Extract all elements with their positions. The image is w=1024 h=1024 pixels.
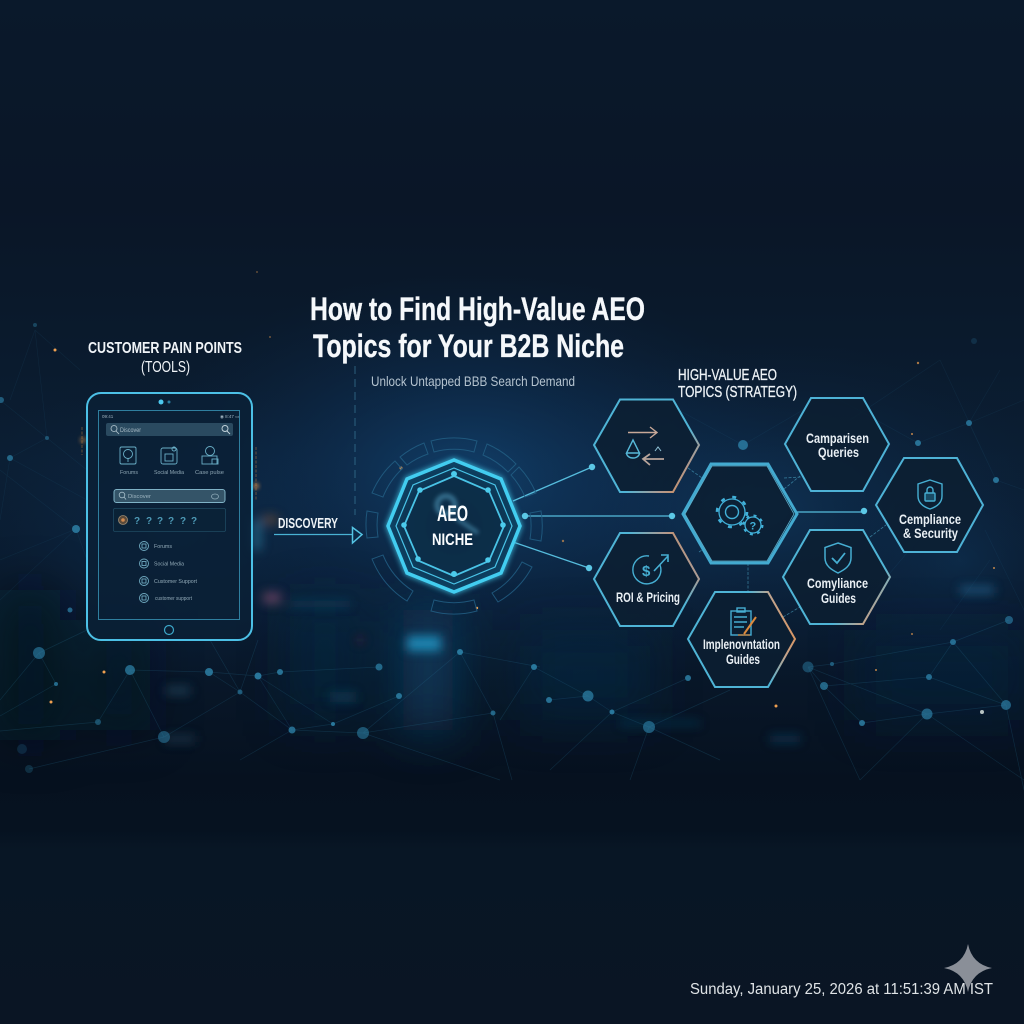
question row: ? <box>157 516 163 527</box>
heading: high-value AEO topics: HIGH-VALUE AEO <box>678 367 777 384</box>
icon: arrows and scale <box>626 427 664 465</box>
title <box>310 291 645 364</box>
icon: gears: ? <box>750 520 756 532</box>
list of sources: Social Media <box>154 562 185 568</box>
hexagon: ROI and pricing: ROI & Pricing <box>616 590 680 605</box>
list of sources: Forums <box>154 544 172 550</box>
hexagon: implementation guides <box>688 592 795 687</box>
icon: clipboard with pencil <box>731 608 756 635</box>
question row: ? <box>168 516 174 527</box>
heading: customer pain points <box>88 340 242 376</box>
sparkle watermark <box>944 944 992 992</box>
list of sources: customer support <box>155 596 192 602</box>
hub outer ring segments <box>366 438 542 614</box>
question row: ? <box>191 516 197 527</box>
icon: dollar with growth arrow: $ <box>642 563 651 580</box>
search bar <box>106 423 233 436</box>
hexagon: comparison queries: Queries <box>818 445 859 460</box>
heading: high-value AEO topics: TOPICS (STRATEGY) <box>678 384 797 401</box>
hexagon: compliance and security: Cempliance <box>899 512 961 527</box>
question row <box>114 508 226 532</box>
list of sources <box>140 542 197 602</box>
tool icon: forums <box>120 447 138 476</box>
heading: high-value AEO topics <box>678 367 797 401</box>
tool icon: social media: Social Media <box>154 470 185 476</box>
question row: ? <box>146 516 152 527</box>
hexagon: comparison icon <box>594 400 699 492</box>
icon: shield with lock <box>918 480 942 509</box>
hexagon: implementation guides: Guides <box>726 652 760 667</box>
hexagon: compliance and security: & Security <box>903 526 958 541</box>
tool icon: case studies: Case pulse <box>195 470 224 476</box>
hexagon: comparison queries: Camparisen <box>806 431 869 446</box>
timestamp: Sunday, January 25, 2026 at 11:51:39 AM IST <box>690 981 994 998</box>
subtitle: Unlock Untapped BBB Search Demand <box>371 373 575 389</box>
discovery arrow: DISCOVERY <box>278 515 338 532</box>
tool icon: social media <box>154 447 185 476</box>
heading: customer pain points: CUSTOMER PAIN POINTS <box>88 340 242 357</box>
question row: ? <box>134 516 140 527</box>
hexagon: central gear and question <box>683 464 797 563</box>
list of sources: Customer Support <box>154 579 197 585</box>
hexagon: comparison queries <box>785 398 889 491</box>
hub: AEO niche <box>366 438 542 614</box>
hexagon: compliance and security <box>876 458 983 552</box>
blurred city skyline <box>0 515 1024 743</box>
discovery arrow <box>274 515 362 543</box>
orange light sparks <box>50 271 995 708</box>
heading: customer pain points: (TOOLS) <box>141 359 190 376</box>
tool icon: forums: Forums <box>120 470 138 476</box>
tool icon: case studies <box>195 446 224 476</box>
dashed connector from title <box>354 366 356 515</box>
title: How to Find High-Value AEO <box>310 291 645 327</box>
hexagon: implementation guides: Implenovntation <box>703 637 780 652</box>
hexagon: compliance guides: Comyliance <box>807 576 868 591</box>
hexagon: ROI and pricing <box>594 533 699 626</box>
network nodes <box>0 323 1013 773</box>
title: Topics for Your B2B Niche <box>313 328 624 364</box>
connector lines from hub to hexagons <box>513 464 886 617</box>
upper network lines <box>0 330 1024 630</box>
search bar: Discover <box>120 428 141 434</box>
discover input: Discover <box>128 494 151 500</box>
network lines <box>0 620 1024 790</box>
question row: ? <box>180 516 186 527</box>
panel: tablet with tools: 09:41 <box>102 414 114 419</box>
hexagon: compliance guides <box>783 530 890 624</box>
icon: shield with check <box>825 543 851 573</box>
panel: tablet with tools <box>87 393 252 640</box>
hexagon: compliance guides: Guides <box>821 591 856 606</box>
hub: AEO niche: NICHE <box>432 530 473 549</box>
panel: tablet with tools: ◉ 8:47 ▭ <box>220 414 240 419</box>
hub: AEO niche: AEO <box>437 501 468 526</box>
discover input <box>114 490 225 502</box>
